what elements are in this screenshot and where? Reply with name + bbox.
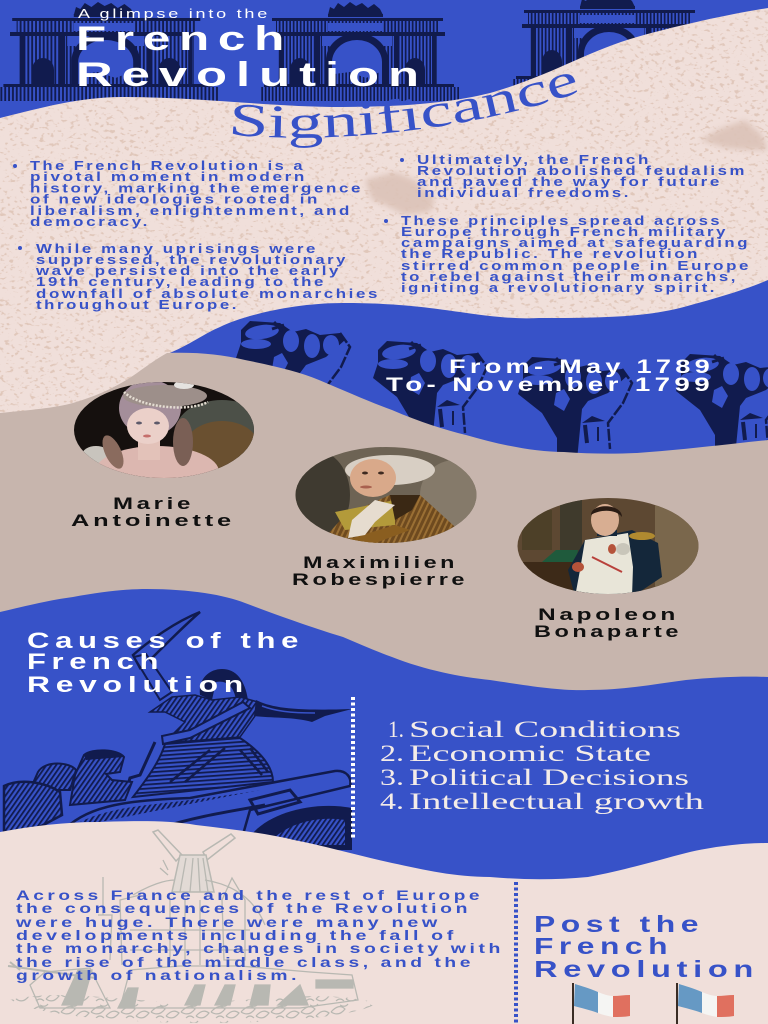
text block: significance left column (13, 158, 380, 312)
title line 1: French (76, 20, 293, 58)
bullet 4: stirred common people in Europe (401, 258, 751, 273)
list: causes (380, 717, 705, 814)
label: Marie Antoinette (71, 495, 235, 530)
bullet 4: igniting a revolutionary spirit. (401, 280, 717, 295)
bullet 4: to rebel against their monarchs, (401, 269, 738, 284)
wheel (245, 806, 352, 850)
dates text: To- November 1799 (386, 375, 714, 396)
text block: consequences: the rise of the middle class, and the (16, 955, 474, 970)
heading: Causes of the French Revolution: French (27, 649, 164, 674)
heading: Significance on a curve: Significance (232, 74, 578, 148)
label: Maximilien Robespierre: Maximilien (303, 554, 458, 572)
bullet 2: throughout Europe. (36, 297, 239, 312)
pointing arm (254, 700, 352, 722)
label: Maximilien Robespierre (292, 554, 468, 589)
text block: consequences: growth of nationalism. (16, 968, 300, 983)
divider: blue dotted line (514, 882, 518, 1024)
item 1: Social Conditions (409, 717, 681, 742)
portrait: Maximilien Robespierre (296, 447, 476, 543)
heading: Post the French Revolution (534, 911, 759, 982)
panel: key figures taupe background (0, 353, 768, 700)
heading: Post the French Revolution: Post the (534, 911, 704, 937)
heading: Post the French Revolution: Revolution (534, 956, 759, 982)
bullet 3: Ultimately, the French (417, 152, 651, 167)
divider: white dotted line (351, 697, 355, 840)
item 3: 3. (380, 765, 404, 790)
text block: consequences: Across France and the rest of Europe (16, 888, 483, 903)
icon: French flag right (677, 983, 734, 1024)
label: Napoleon Bonaparte: Bonaparte (534, 623, 682, 641)
illustration: monument outline (8, 830, 377, 1023)
sword and raised arm (133, 612, 200, 668)
bullet 2: suppressed, the revolutionary (36, 252, 348, 267)
label: Marie Antoinette: Antoinette (71, 512, 235, 530)
bullet 1: of new ideologies rooted in (30, 192, 320, 206)
icon: French flag left (573, 983, 630, 1024)
bullet 1: pivotal moment in modern (30, 169, 307, 184)
text block: consequences: developments including the fall of (16, 928, 457, 943)
bullet 3: Revolution abolished feudalism (417, 163, 747, 178)
bullet 3 (400, 152, 747, 200)
sash (162, 702, 250, 744)
text block: consequences: the monarchy, changes in society with (16, 941, 504, 956)
item 3: Political Decisions (409, 765, 689, 790)
bullet 2: 19th century, leading to the (36, 274, 326, 289)
label: Napoleon Bonaparte: Napoleon (538, 606, 679, 624)
bullet 4: the Republic. The revolution (401, 246, 700, 261)
head (200, 669, 248, 700)
bullet 2 (18, 241, 380, 312)
dates text (386, 357, 714, 396)
heading: Causes of the French Revolution (27, 628, 304, 697)
torso (150, 695, 258, 743)
bullet 1: liberalism, enlightenment, and (30, 203, 352, 218)
bullet 1: history, marking the emergence (30, 180, 363, 196)
panel: dates blue band (165, 280, 768, 460)
dress (133, 738, 273, 797)
dates text: From- May 1789 (449, 357, 714, 378)
item 2 (380, 741, 651, 766)
text block: consequences: were huge. There were many new (15, 915, 441, 930)
soldiers (70, 750, 132, 805)
item 2: Economic State (409, 741, 651, 766)
bullet 4: These principles spread across (401, 213, 722, 228)
label: Marie Antoinette: Marie (113, 495, 194, 513)
heading: Causes of the French Revolution: Revolution (27, 672, 249, 697)
bullet 3: and paved the way for future (417, 174, 722, 189)
bullet 3: individual freedoms. (417, 185, 631, 200)
title line 2: Revolution (76, 56, 428, 94)
bullet 1: The French Revolution is a (30, 158, 305, 173)
portrait: Napoleon Bonaparte (518, 498, 698, 594)
label: Napoleon Bonaparte (534, 606, 682, 641)
item 2: 2. (380, 741, 404, 766)
bullet 1 (13, 158, 363, 229)
bullet 4 (384, 213, 751, 295)
bullet 4: campaigns aimed at safeguarding (401, 235, 750, 250)
item 4: Intellectual growth (409, 789, 705, 814)
panel: significance background (0, 0, 768, 430)
item 4 (380, 789, 705, 814)
text block: consequences (15, 888, 504, 983)
header: French Revolution title (76, 6, 428, 94)
cannon (66, 771, 350, 845)
portrait: Marie Antoinette (74, 382, 254, 478)
subtitle: A glimpse into the (78, 6, 270, 21)
illustration: triumphal arches (0, 0, 712, 101)
text block: consequences: the consequences of the Revolution (16, 901, 471, 916)
illustration: Liberty leading with cannon (4, 612, 352, 850)
panel: post revolution background (0, 821, 768, 1024)
bullet 2: While many uprisings were (36, 241, 318, 256)
bullet 1: democracy. (30, 214, 150, 229)
text block: significance right column (384, 152, 751, 295)
item 3 (380, 765, 689, 790)
heading: Post the French Revolution: French (534, 933, 673, 959)
item 1: 1. (388, 717, 404, 742)
heading: Causes of the French Revolution: Causes of the (27, 628, 304, 653)
label: Maximilien Robespierre: Robespierre (292, 571, 468, 589)
panel: causes blue background (0, 589, 768, 880)
icon: raised fists (236, 321, 768, 470)
bullet 2: downfall of absolute monarchies (36, 286, 380, 301)
item 4: 4. (380, 789, 404, 814)
bullet 4: Europe through French military (401, 224, 728, 239)
bullet 2: wave persisted into the early (35, 263, 341, 278)
item 1 (388, 717, 681, 742)
